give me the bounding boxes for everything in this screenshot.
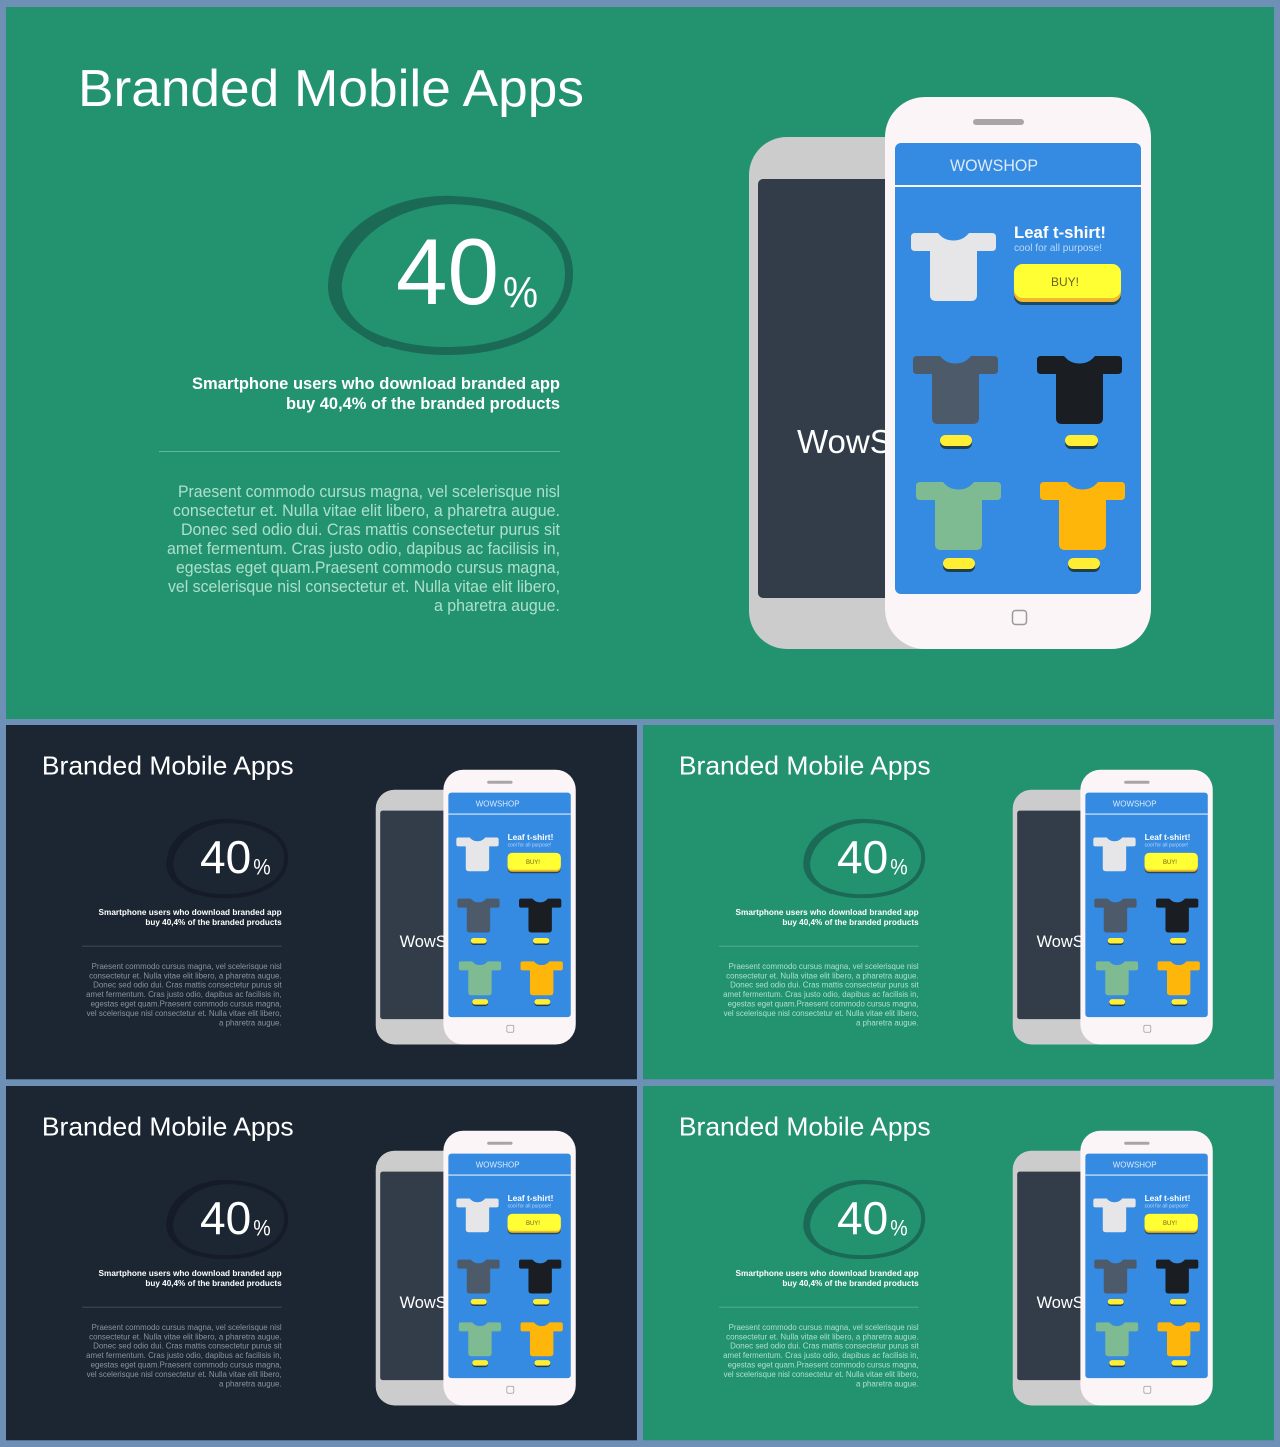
front phone: BUY! [526,1221,540,1227]
front phone: cool for all purpose! [1014,242,1102,254]
body text: amet fermentum. Cras justo odio, dapibus ac facilisis in, [723,1351,919,1360]
body text [167,483,560,615]
stat: 40 percent: 40 [200,831,251,883]
lead text: Smartphone users who download branded app [192,375,560,393]
body text: consectetur et. Nulla vitae elit libero, a pharetra augue. [89,1332,282,1341]
front phone [443,1131,576,1405]
body text: consectetur et. Nulla vitae elit libero, a pharetra augue. [726,1332,919,1341]
body text: a pharetra augue. [856,1380,919,1389]
panel: small green slide bottom right [643,1086,1274,1440]
front phone: WOWSHOP [476,1161,520,1170]
hand-drawn ring [805,821,923,896]
stat: 40 percent: 40 [837,831,888,883]
lead text: Smartphone users who download branded app [99,1269,282,1278]
body text: Donec sed odio dui. Cras mattis consectetur purus sit [93,981,282,990]
front phone: BUY! [1163,1221,1177,1227]
title: Branded Mobile Apps [78,60,584,118]
body text: consectetur et. Nulla vitae elit libero, a pharetra augue. [726,971,919,980]
front phone: WOWSHOP [1113,1161,1157,1170]
front phone: cool for all purpose! [508,1203,551,1209]
back phone [1013,790,1137,1044]
back phone: WowShop [400,933,474,951]
body text: consectetur et. Nulla vitae elit libero, a pharetra augue. [89,971,282,980]
front phone [443,770,576,1044]
body text: vel scelerisque nisl consectetur et. Nulla vitae elit libero, [87,1370,282,1379]
lead text [99,908,282,927]
stat: 40 percent: % [253,1215,271,1240]
body text: vel scelerisque nisl consectetur et. Nulla vitae elit libero, [724,1009,919,1018]
stat: 40 percent: % [890,1215,908,1240]
lead text: buy 40,4% of the branded products [286,395,560,413]
front phone: BUY! [526,860,540,866]
lead text: buy 40,4% of the branded products [145,918,282,927]
body text: egestas eget quam.Praesent commodo cursus magna, [91,1000,282,1009]
back phone: WowShop [1037,1294,1111,1312]
back phone [376,790,500,1044]
title: Branded Mobile Apps [679,1113,931,1141]
lead text: Smartphone users who download branded app [736,908,919,917]
front phone: cool for all purpose! [1145,842,1188,848]
body text: Praesent commodo cursus magna, vel scelerisque nisl [729,1323,919,1332]
hand-drawn ring [168,1182,286,1257]
title: Branded Mobile Apps [679,752,931,780]
back phone [376,1151,500,1405]
body text: a pharetra augue. [219,1019,282,1028]
back phone: WowShop [797,423,947,460]
body text [723,1323,919,1389]
front phone: Leaf t-shirt! [508,833,553,842]
back phone [749,137,999,649]
body text: Donec sed odio dui. Cras mattis consectetur purus sit [730,981,919,990]
lead text [736,908,919,927]
lead text: Smartphone users who download branded app [736,1269,919,1278]
body text: Praesent commodo cursus magna, vel scelerisque nisl [92,1323,282,1332]
body text: consectetur et. Nulla vitae elit libero, a pharetra augue. [173,502,560,520]
title: Branded Mobile Apps [42,1113,294,1141]
stat: 40 percent: % [890,854,908,879]
panel: small dark slide bottom left [6,1086,637,1440]
stat: 40 percent: 40 [200,1192,251,1244]
front phone: WOWSHOP [950,157,1038,175]
body text: Donec sed odio dui. Cras mattis consectetur purus sit [181,521,560,539]
hand-drawn ring [805,1182,923,1257]
body text: amet fermentum. Cras justo odio, dapibus ac facilisis in, [86,990,282,999]
stat: 40 percent: 40 [396,219,499,324]
body text: amet fermentum. Cras justo odio, dapibus ac facilisis in, [86,1351,282,1360]
body text: Donec sed odio dui. Cras mattis consectetur purus sit [730,1342,919,1351]
body text: egestas eget quam.Praesent commodo cursus magna, [91,1361,282,1370]
front phone: Leaf t-shirt! [1145,833,1190,842]
body text [723,962,919,1028]
body text: Praesent commodo cursus magna, vel scelerisque nisl [92,962,282,971]
lead text: buy 40,4% of the branded products [782,1279,919,1288]
panel: small green slide top right [643,725,1274,1079]
front phone: Leaf t-shirt! [508,1194,553,1203]
front phone: WOWSHOP [476,800,520,809]
front phone [1080,770,1213,1044]
body text: Praesent commodo cursus magna, vel scelerisque nisl [178,483,560,501]
stat: 40 percent: % [503,268,538,317]
body text: egestas eget quam.Praesent commodo cursus magna, [176,559,560,577]
stat: 40 percent: 40 [837,1192,888,1244]
title: Branded Mobile Apps [42,752,294,780]
front phone: BUY! [1051,275,1079,289]
body text: vel scelerisque nisl consectetur et. Nulla vitae elit libero, [87,1009,282,1018]
body text: amet fermentum. Cras justo odio, dapibus ac facilisis in, [723,990,919,999]
lead text: buy 40,4% of the branded products [782,918,919,927]
front phone: WOWSHOP [1113,800,1157,809]
body text: vel scelerisque nisl consectetur et. Nulla vitae elit libero, [168,578,560,596]
front phone: cool for all purpose! [508,842,551,848]
front phone: BUY! [1163,860,1177,866]
back phone: WowShop [400,1294,474,1312]
hand-drawn ring [332,200,569,351]
body text: vel scelerisque nisl consectetur et. Nulla vitae elit libero, [724,1370,919,1379]
lead text: Smartphone users who download branded app [99,908,282,917]
front phone [1080,1131,1213,1405]
body text [86,1323,282,1389]
body text: a pharetra augue. [219,1380,282,1389]
body text: a pharetra augue. [856,1019,919,1028]
panel: small dark slide top left [6,725,637,1079]
lead text: buy 40,4% of the branded products [145,1279,282,1288]
body text: Donec sed odio dui. Cras mattis consectetur purus sit [93,1342,282,1351]
body text: egestas eget quam.Praesent commodo cursus magna, [728,1000,919,1009]
body text [86,962,282,1028]
front phone: cool for all purpose! [1145,1203,1188,1209]
body text: amet fermentum. Cras justo odio, dapibus ac facilisis in, [167,540,560,558]
lead text [736,1269,919,1288]
stat: 40 percent: % [253,854,271,879]
body text: egestas eget quam.Praesent commodo cursus magna, [728,1361,919,1370]
front phone [885,97,1151,649]
back phone [1013,1151,1137,1405]
front phone: Leaf t-shirt! [1145,1194,1190,1203]
lead text [99,1269,282,1288]
back phone: WowShop [1037,933,1111,951]
lead text [192,375,560,413]
hand-drawn ring [168,821,286,896]
panel: large green slide [6,7,1274,719]
body text: a pharetra augue. [434,597,560,615]
front phone: Leaf t-shirt! [1014,224,1106,242]
body text: Praesent commodo cursus magna, vel scelerisque nisl [729,962,919,971]
